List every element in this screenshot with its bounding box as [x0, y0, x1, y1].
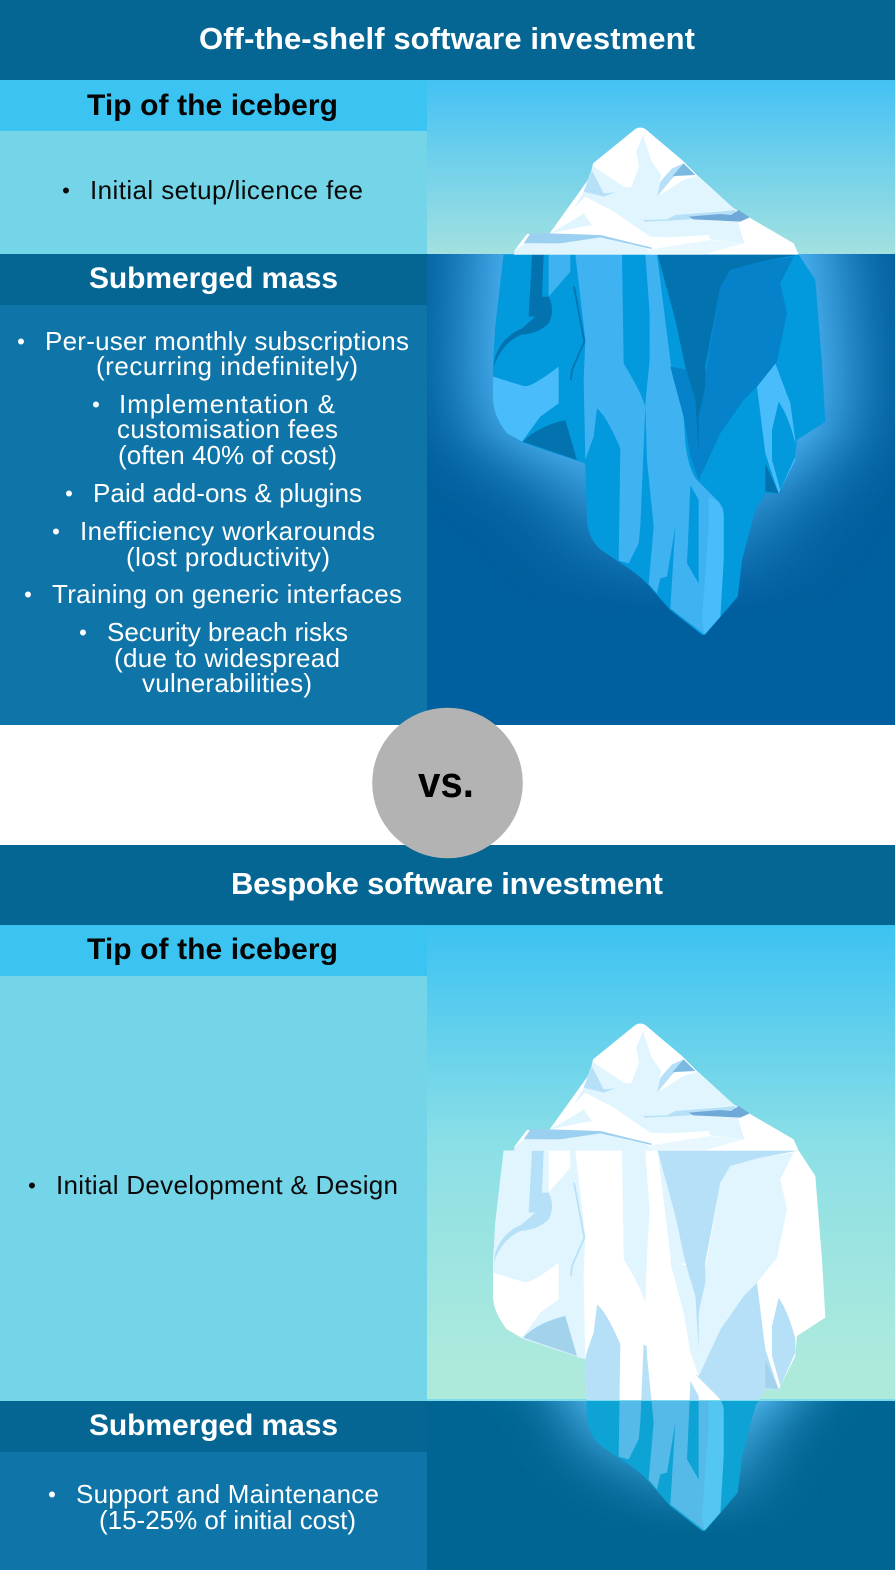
list: hidden costs: Inefficiency workarounds: [80, 516, 375, 546]
heading: tip of the iceberg: Tip of the iceberg: [87, 89, 338, 122]
list: hidden costs: (recurring indefinitely): [96, 351, 358, 381]
title bar: bespoke: Bespoke software investment: [231, 866, 663, 901]
title bar: off-the-shelf: [0, 0, 895, 80]
heading: submerged mass: Submerged mass: [89, 262, 338, 295]
list: hidden costs: •: [52, 519, 60, 544]
list: hidden costs: Per-user monthly subscriptions: [45, 326, 409, 356]
list: hidden costs: (lost productivity): [126, 542, 330, 572]
panel: tip of the iceberg: [0, 80, 427, 254]
panel: bespoke software investment: [0, 845, 895, 1570]
list: hidden costs: Paid add-ons & plugins: [93, 478, 362, 508]
list item: support and maintenance: (15-25% of initial cost): [99, 1505, 356, 1535]
list item: development and design: •: [28, 1173, 36, 1198]
badge: vs.: vs.: [418, 758, 474, 807]
title bar: bespoke: [0, 845, 895, 925]
panel: submerged mass: [0, 1401, 427, 1570]
illustration: iceberg, mostly above water: [427, 925, 895, 1570]
panel: submerged mass: [0, 254, 427, 725]
list item: development and design: Initial Development & Design: [56, 1170, 398, 1200]
list item: setup fee: Initial setup/licence fee: [90, 175, 363, 205]
panel: off-the-shelf software investment: [0, 0, 895, 725]
list: hidden costs: vulnerabilities): [142, 668, 312, 698]
list item: support and maintenance: Support and Maintenance: [76, 1479, 379, 1509]
list: hidden costs: •: [17, 329, 25, 354]
list: hidden costs: •: [24, 582, 32, 607]
badge: vs.: [372, 708, 523, 858]
list: hidden costs: (due to widespread: [114, 643, 340, 673]
panel: tip of the iceberg: [0, 925, 427, 1401]
heading: submerged mass: Submerged mass: [89, 1409, 338, 1442]
list item: setup fee: •: [62, 178, 70, 203]
list item: support and maintenance: •: [48, 1482, 56, 1507]
list: hidden costs: •: [65, 481, 73, 506]
illustration: iceberg, mostly submerged: [427, 80, 895, 725]
list: hidden costs: Security breach risks: [107, 617, 348, 647]
list: hidden costs: •: [79, 620, 87, 645]
list: hidden costs: Training on generic interfaces: [52, 579, 402, 609]
list item: support and maintenance: [48, 1479, 379, 1535]
heading: tip of the iceberg: Tip of the iceberg: [87, 933, 338, 966]
list: hidden costs: customisation fees: [117, 414, 338, 444]
list: hidden costs: [17, 326, 409, 698]
list: hidden costs: Implementation &: [119, 389, 335, 419]
title bar: off-the-shelf: Off-the-shelf software investment: [199, 21, 695, 56]
list: hidden costs: (often 40% of cost): [118, 440, 337, 470]
list: hidden costs: •: [92, 392, 100, 417]
